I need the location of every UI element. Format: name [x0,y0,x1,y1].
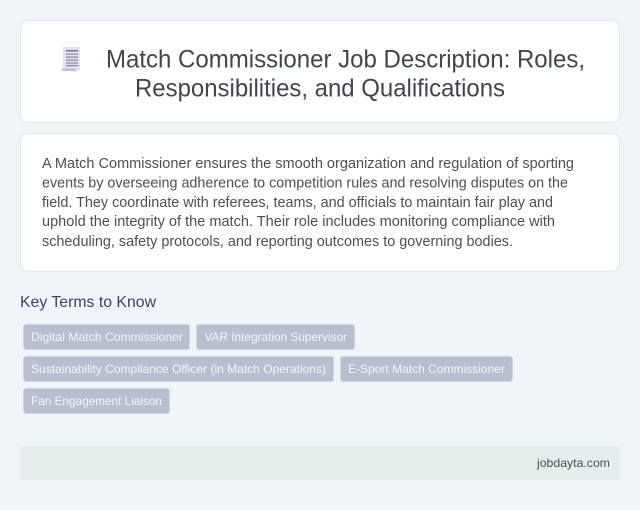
chip: Fan Engagement Liaison: Fan Engagement Liaison [31,394,162,408]
chip: Fan Engagement Liaison [24,388,170,414]
panel: description [20,134,620,272]
heading: key terms: Key Terms to Know [20,294,156,311]
icon: document scroll [61,47,80,71]
chip: E-Sport Match Commissioner: E-Sport Match Commissioner [348,362,505,376]
chip: VAR Integration Supervisor [196,324,354,350]
footer bar [20,446,620,480]
footer bar: jobdayta.com [536,456,610,470]
title: Match Commissioner Job Description: Roles, [106,46,585,74]
description text: A Match Commissioner ensures the smooth organization and regulation of sporting [42,156,574,172]
panel: title card [20,20,620,122]
title [106,46,585,102]
description text: events by overseeing adherence to competition rules and resolving disputes on the [42,176,568,192]
description text: scheduling, safety protocols, and reporting outcomes to governing bodies. [42,234,513,250]
chip: Sustainability Compliance Officer [24,356,334,382]
chip: Sustainability Compliance Officer: Sustainability Compliance Officer (in Match Operations) [31,362,326,376]
description text: uphold the integrity of the match. Their role includes monitoring compliance with [42,214,555,230]
description text [42,156,574,250]
chip: E-Sport Match Commissioner [340,356,512,382]
chip: VAR Integration Supervisor: VAR Integration Supervisor [204,330,347,344]
description text: field. They coordinate with referees, teams, and officials to maintain fair play and [42,195,553,211]
title: Responsibilities, and Qualifications [135,74,505,102]
chip: Digital Match Commissioner: Digital Match Commissioner [31,330,183,344]
chip: Digital Match Commissioner [24,324,190,350]
